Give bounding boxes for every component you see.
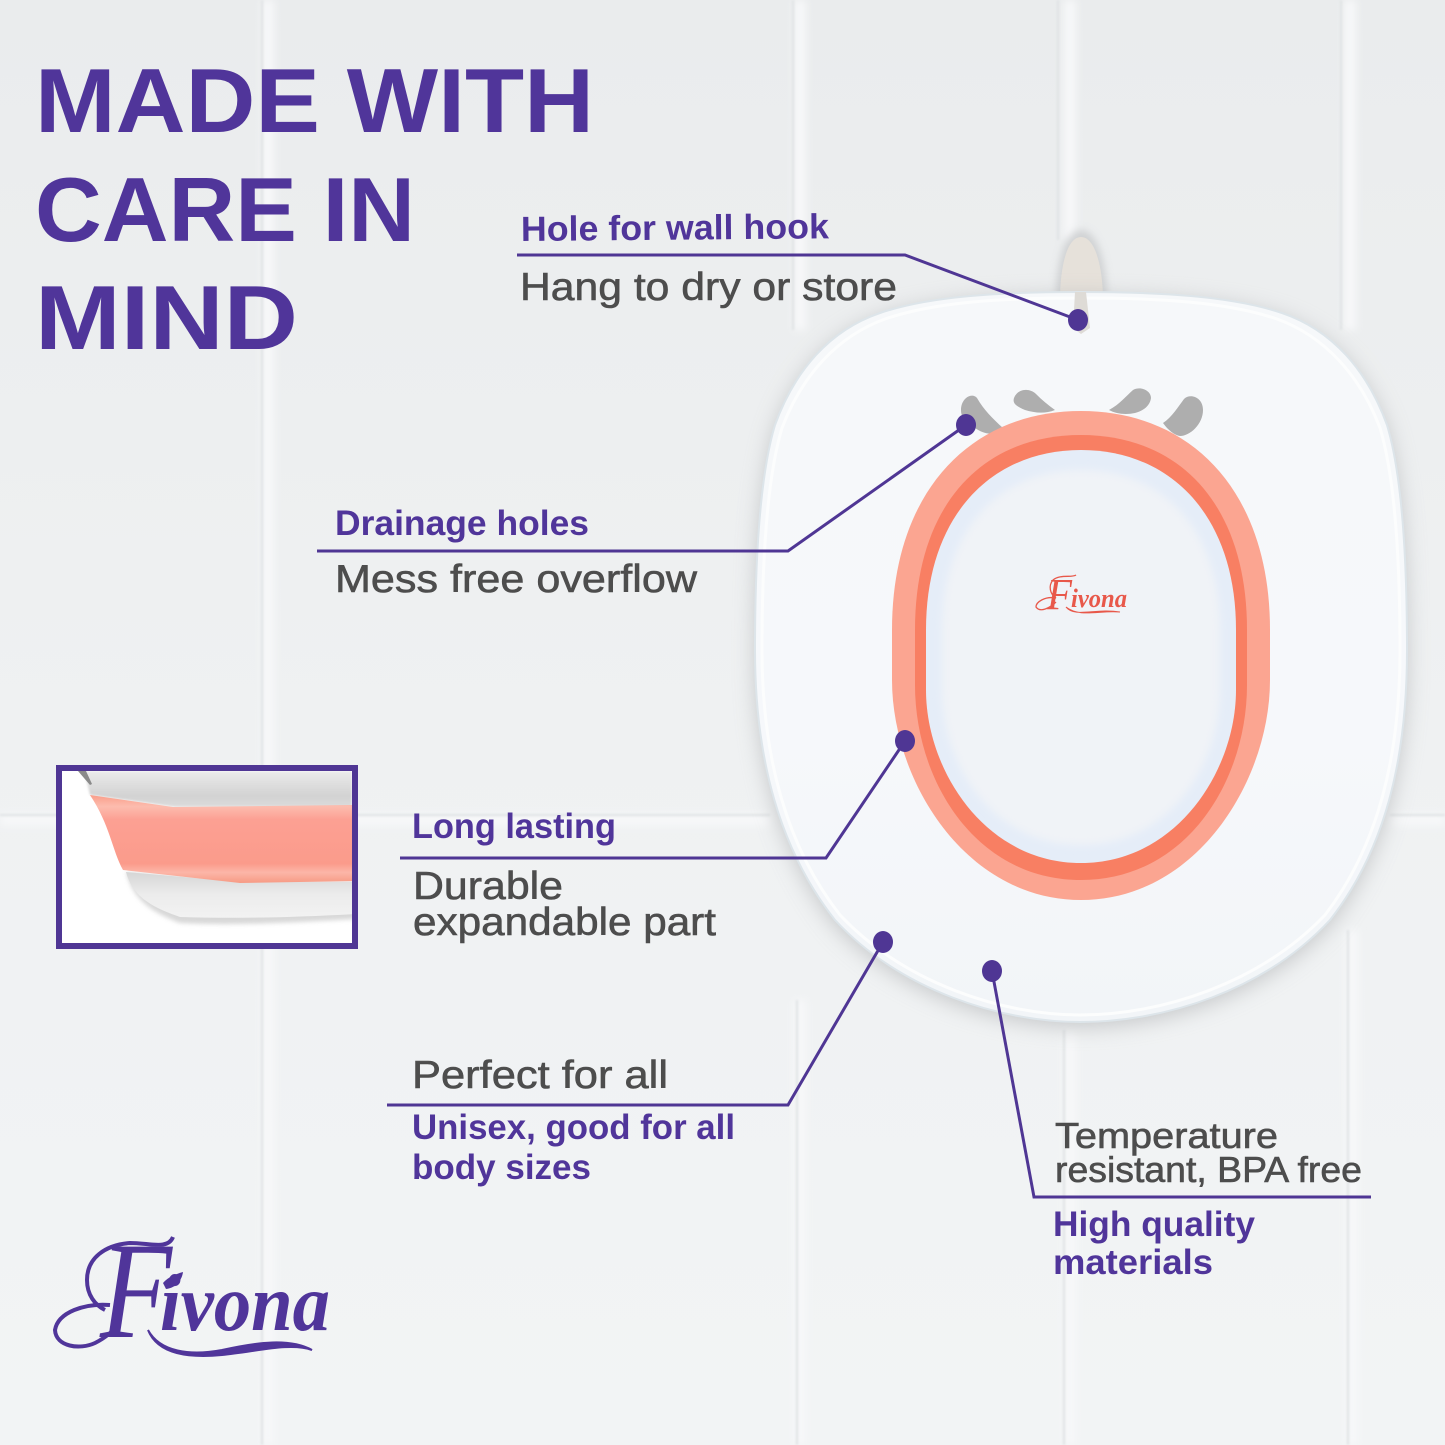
hook slot <box>1073 292 1090 334</box>
callout: drainage holes <box>317 414 976 601</box>
title: MIND <box>35 268 298 369</box>
small product logo: F <box>1046 570 1073 619</box>
callout: long lasting: Long lasting <box>412 807 616 846</box>
callout: drainage holes: Drainage holes <box>335 504 589 543</box>
callout: long lasting: expandable part <box>413 901 716 944</box>
callout: high quality materials: materials <box>1053 1243 1213 1282</box>
brand logo <box>55 1214 330 1367</box>
callout: long lasting: Durable <box>413 865 563 908</box>
drainage holes <box>961 388 1203 436</box>
callout: hole for wall hook: Hang to dry or store <box>520 266 897 309</box>
callout: hole for wall hook: Hole for wall hook <box>521 207 830 249</box>
title: CARE IN <box>35 160 415 261</box>
callout: drainage holes: Mess free overflow <box>335 558 698 601</box>
basin rim highlight <box>762 298 1400 1015</box>
brand logo: ivona <box>160 1260 330 1348</box>
small product logo <box>1036 570 1127 619</box>
callout: high quality materials <box>982 960 1371 1282</box>
inset: expandable part close-up <box>59 768 356 946</box>
callout: perfect for all: body sizes <box>412 1148 591 1187</box>
title: MADE WITH <box>35 51 594 152</box>
product: sitz bath basin <box>755 292 1407 1027</box>
callout: high quality materials: High quality <box>1053 1205 1256 1244</box>
brand logo: F <box>99 1214 173 1367</box>
expandable ring <box>892 411 1270 900</box>
basin shadow <box>755 297 1407 1027</box>
inner basin <box>926 450 1236 863</box>
callout: perfect for all: Unisex, good for all <box>412 1108 735 1147</box>
callout: hole for wall hook <box>517 207 1088 331</box>
callout: high quality materials: Temperature <box>1055 1115 1278 1156</box>
callout: perfect for all: Perfect for all <box>412 1054 668 1097</box>
callout: perfect for all <box>387 931 893 1187</box>
callout: long lasting <box>400 730 915 944</box>
title <box>35 51 594 369</box>
icon: wall hook <box>1056 230 1107 300</box>
basin body <box>755 292 1407 1022</box>
small product logo: ivona <box>1071 584 1127 613</box>
callout: high quality materials: resistant, BPA free <box>1055 1149 1362 1190</box>
